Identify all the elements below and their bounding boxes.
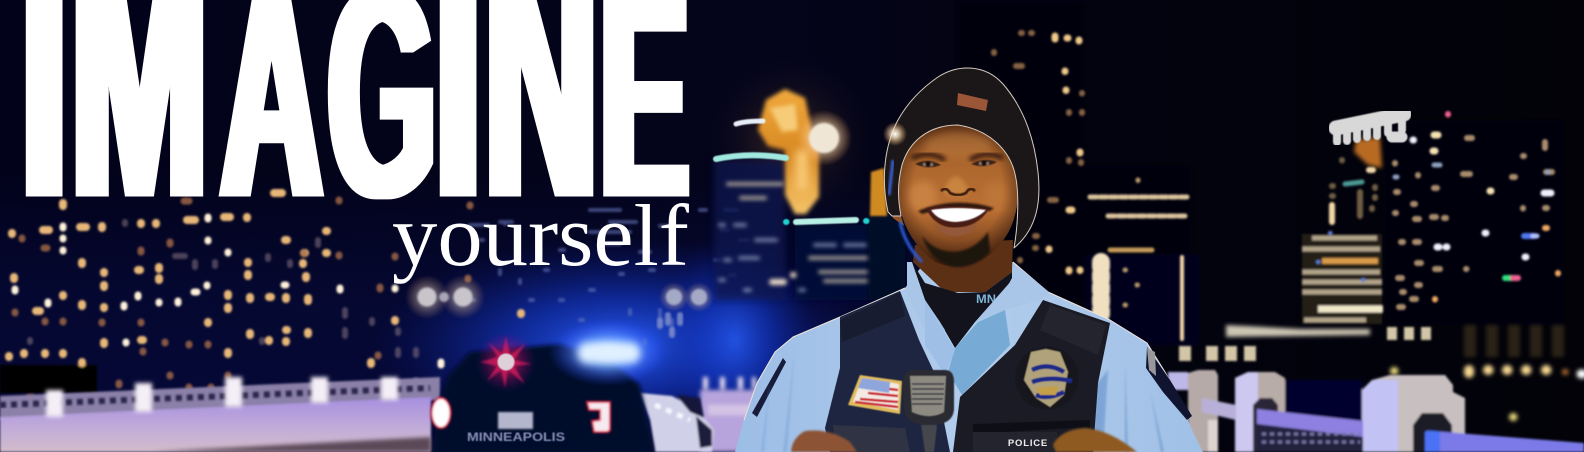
sleeve shading <box>1092 360 1164 452</box>
lit windows behind officer <box>994 33 1188 339</box>
white crown sign <box>1336 114 1404 142</box>
goatee <box>922 232 990 267</box>
blue edge light <box>889 160 893 195</box>
license plate <box>498 412 533 429</box>
subtitle yourself: yourself <box>392 188 690 285</box>
title word IMAGINE <box>20 0 688 276</box>
upper tower windows <box>1332 160 1375 222</box>
orange crown <box>1354 137 1382 168</box>
mouth <box>926 206 989 228</box>
mustache <box>918 203 994 214</box>
hat patch <box>957 93 988 111</box>
left tail light <box>432 398 450 428</box>
left bridge barrier and railing <box>0 377 440 452</box>
lower lip <box>934 224 978 236</box>
street lamps <box>405 275 714 390</box>
white star light <box>796 110 852 166</box>
blue roof light <box>548 318 668 386</box>
lens flare on hat <box>883 122 907 146</box>
dark tower behind officer <box>957 0 1200 345</box>
right low building <box>1394 325 1583 417</box>
brow shadow <box>912 154 1003 160</box>
police label <box>973 432 1057 452</box>
badge <box>1016 347 1078 409</box>
red roof light <box>476 332 536 392</box>
left eye <box>915 161 941 167</box>
shoulder patch right <box>1146 347 1192 420</box>
radio microphone <box>903 370 954 452</box>
left city building with lit windows <box>0 193 749 398</box>
shirt placket <box>948 310 1010 395</box>
teal and white sign bars <box>716 121 866 222</box>
gold side tower <box>870 168 887 216</box>
central windows <box>720 184 866 290</box>
right eye <box>971 160 997 166</box>
middle post <box>1235 372 1285 452</box>
beanie hat <box>883 68 1039 248</box>
shirt and shoulders <box>735 262 1203 452</box>
far bridge and road right of car <box>700 377 765 452</box>
second police vehicle <box>640 393 714 452</box>
cream window squares <box>1179 327 1431 361</box>
horizontal glow strip <box>1226 325 1370 337</box>
shirt collar <box>907 262 1049 345</box>
gold tower blob <box>758 89 819 214</box>
right skyline <box>1179 114 1583 417</box>
front rail <box>1425 431 1584 452</box>
police label: POLICE <box>1008 438 1048 449</box>
right tail light <box>587 402 610 432</box>
blue tower <box>714 160 785 300</box>
teeth <box>931 208 986 222</box>
shoulder rim light <box>744 262 1188 420</box>
collar text: MN <box>976 292 996 306</box>
police officer <box>735 68 1203 452</box>
cheek highlights <box>909 181 937 211</box>
face <box>898 125 1018 267</box>
nose <box>941 176 975 196</box>
near post <box>1362 375 1465 452</box>
central skyline towers <box>714 89 905 300</box>
rail between posts <box>1257 409 1363 437</box>
hands <box>791 428 1137 452</box>
vest left panel <box>825 291 950 452</box>
ear <box>891 200 904 226</box>
right tower <box>1383 120 1565 325</box>
title group <box>20 0 690 285</box>
police car rear <box>432 318 668 452</box>
forehead highlight <box>924 133 992 157</box>
blue jaw rim light <box>900 222 922 262</box>
lower lit building <box>1302 233 1383 324</box>
right tower windows <box>1395 114 1558 307</box>
vest right panel <box>953 300 1110 452</box>
shoulder patch left <box>752 358 786 417</box>
car lettering: MINNEAPOLIS <box>467 432 565 444</box>
flag patch <box>848 375 902 414</box>
far post <box>1188 370 1218 452</box>
neck <box>913 240 1013 292</box>
right bridge posts and rails <box>1168 370 1584 452</box>
black turtleneck <box>912 262 1012 348</box>
